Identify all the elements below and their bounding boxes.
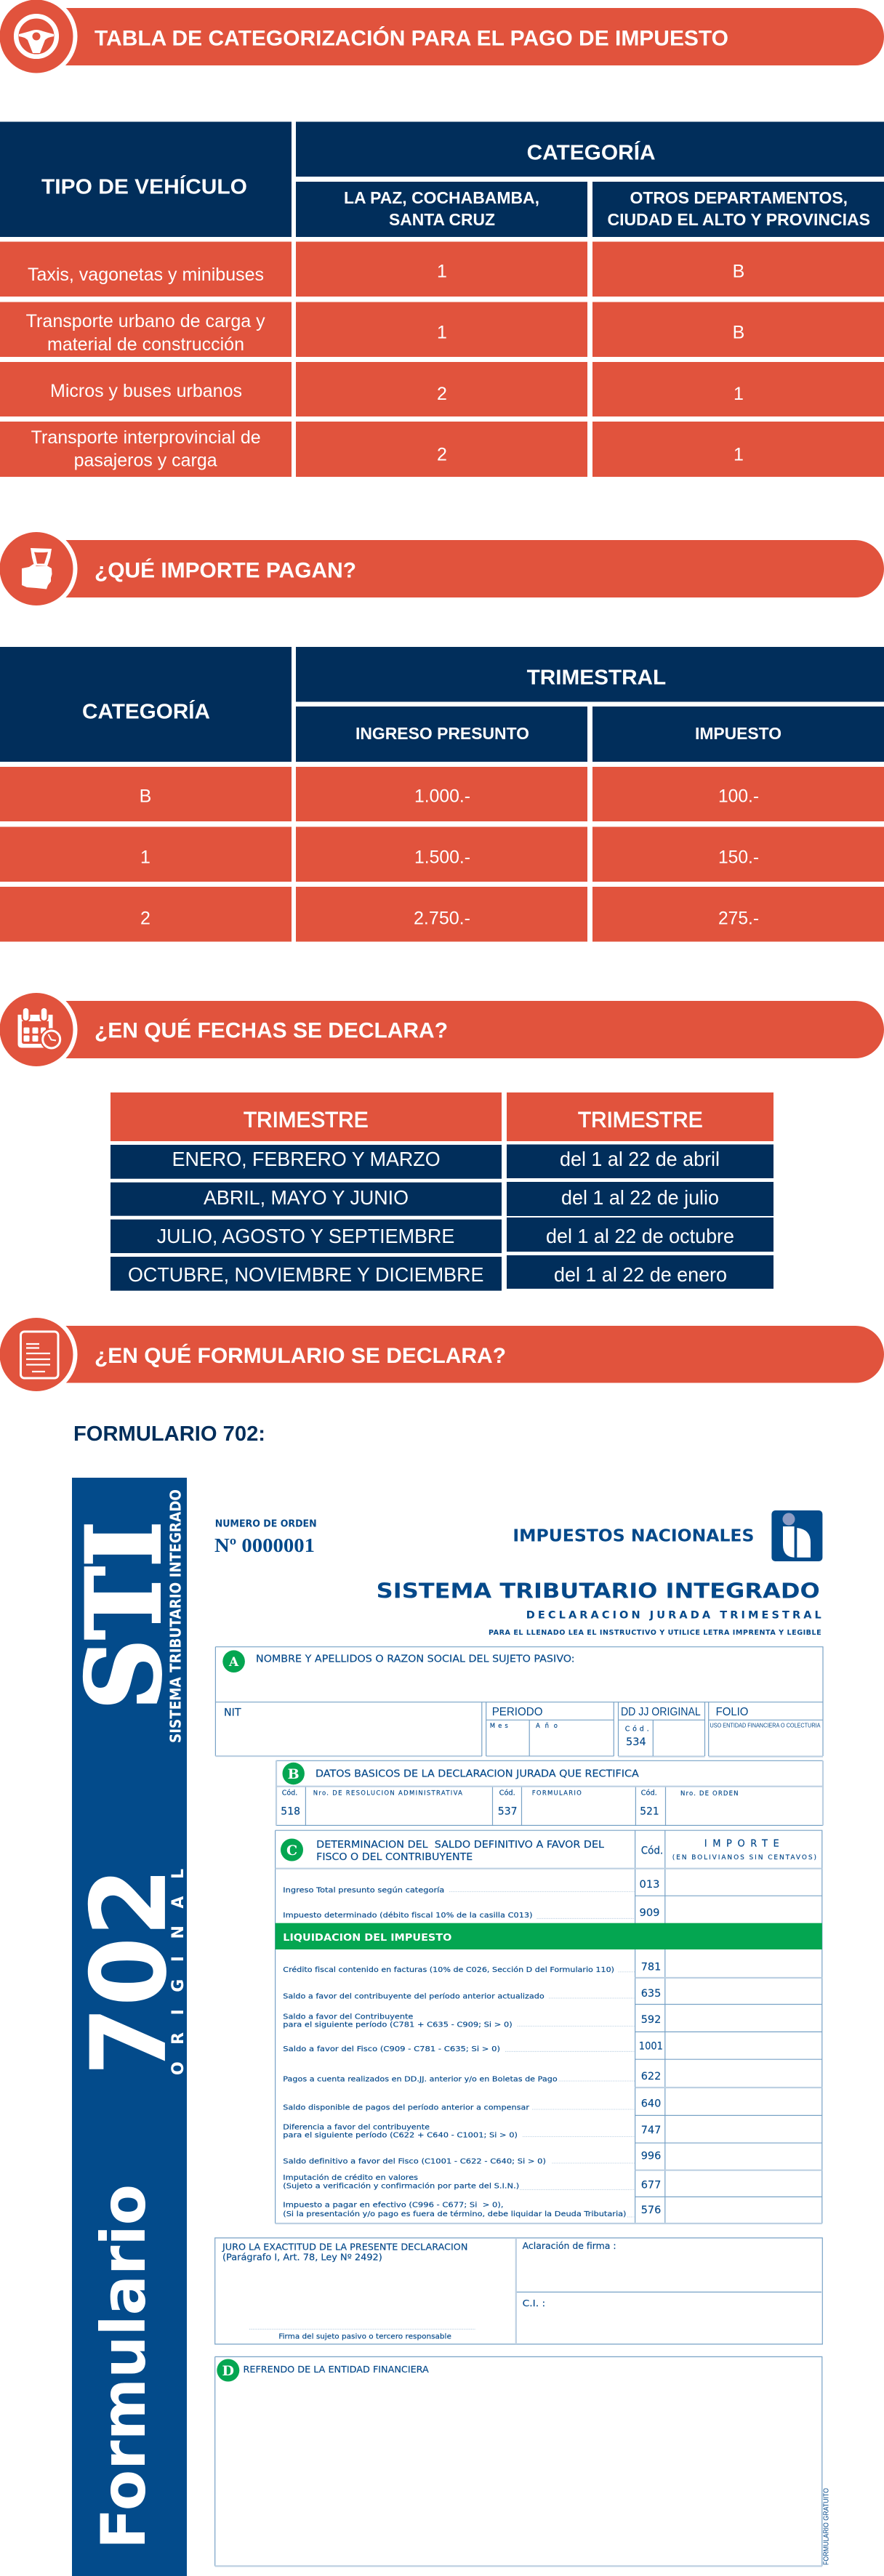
- table rows: 1: [140, 848, 150, 868]
- table headers: CATEGORÍA: [82, 699, 210, 723]
- form header: impuestos nacionales: IMPUESTOS NACIONALES: [513, 1527, 754, 1546]
- badge D: D: [222, 2363, 234, 2379]
- form section A: Mes: [490, 1723, 508, 1730]
- table rows: 100.-: [718, 786, 759, 807]
- table headers: TRIMESTRAL: [527, 666, 666, 689]
- form signature box: C.I. :: [523, 2298, 545, 2309]
- table rows: del 1 al 22 de abril: [560, 1148, 720, 1170]
- banner: formulario: [0, 1313, 884, 1396]
- heading: TABLA DE CATEGORIZACIÓN PARA EL PAGO DE IMPUESTO: [95, 26, 728, 51]
- table headers: LA PAZ, COCHABAMBA,: [344, 188, 539, 207]
- form row labels: Diferencia a favor del contribuyente: [283, 2123, 430, 2131]
- icon: steering wheel: [16, 16, 57, 57]
- heading: ¿EN QUÉ FECHAS SE DECLARA?: [95, 1018, 448, 1042]
- form section B: [276, 1760, 823, 1825]
- form signature box: [215, 2238, 822, 2344]
- table rows: 275.-: [718, 908, 759, 928]
- banner: qué importe pagan: [0, 528, 884, 610]
- form section C: DETERMINACION DEL SALDO DEFINITIVO A FAVOR DEL: [316, 1840, 605, 1851]
- table headers: INGRESO PRESUNTO: [355, 724, 529, 743]
- form section D: [215, 2356, 831, 2566]
- form section A: DD JJ ORIGINAL: [621, 1706, 701, 1718]
- form section D: FORMULARIO GRATUITO: [823, 2488, 831, 2565]
- form row labels: Saldo definitivo a favor del Fisco (C1001 - C622 - C640; Si > 0): [283, 2157, 546, 2165]
- table rows: Transporte interprovincial de: [31, 427, 261, 448]
- table headers: [41, 140, 870, 229]
- table headers: CATEGORÍA: [527, 140, 656, 165]
- table headers: OTROS DEPARTAMENTOS,: [630, 188, 848, 207]
- banner: tabla de categorización: [0, 0, 884, 77]
- table rows: del 1 al 22 de julio: [561, 1186, 719, 1209]
- banner: fechas: [0, 989, 884, 1071]
- form row labels: Saldo a favor del Fisco (C909 - C781 - C635; Si > 0): [283, 2045, 500, 2053]
- form row codes: 576: [641, 2205, 661, 2216]
- form section D: REFRENDO DE LA ENTIDAD FINANCIERA: [243, 2364, 430, 2375]
- table rows: Micros y buses urbanos: [50, 381, 242, 401]
- icon: logo: [771, 1510, 822, 1561]
- table rows: 2: [437, 384, 447, 404]
- form section C: [276, 1830, 822, 2223]
- heading: ¿EN QUÉ FORMULARIO SE DECLARA?: [95, 1343, 506, 1368]
- table rows: B: [733, 262, 744, 282]
- form section A: FOLIO: [716, 1706, 748, 1718]
- badge B: [282, 1763, 305, 1784]
- form row labels: Pagos a cuenta realizados en DD.JJ. anterior y/o en Boletas de Pago: [283, 2076, 558, 2084]
- badge C: [281, 1839, 303, 1861]
- form row codes: [639, 1879, 663, 2216]
- form signature box: Firma del sujeto pasivo o tercero responsable: [278, 2333, 451, 2340]
- badge D: [217, 2359, 239, 2381]
- form row codes: 592: [641, 2014, 661, 2026]
- form section B: 518: [281, 1806, 300, 1818]
- form row codes: 1001: [639, 2041, 663, 2053]
- table rows: 1: [437, 262, 447, 282]
- form section C: IMPORTE: [704, 1839, 779, 1850]
- form section A: 534: [626, 1736, 646, 1748]
- form section A: Cód.: [625, 1725, 649, 1733]
- table headers: [244, 1108, 702, 1132]
- table rows: 1.000.-: [414, 786, 470, 807]
- form section A: [215, 1647, 823, 1756]
- form section C: Cód.: [641, 1846, 663, 1857]
- table rows: del 1 al 22 de octubre: [546, 1225, 734, 1247]
- icon: hand holding bill: [22, 548, 52, 589]
- table rows: [26, 262, 744, 471]
- form section A: USO ENTIDAD FINANCIERA O COLECTURIA: [710, 1722, 821, 1729]
- badge C: C: [286, 1843, 297, 1859]
- table rows: 2: [140, 908, 150, 928]
- table headers: [82, 666, 781, 743]
- form row codes: 747: [641, 2125, 661, 2136]
- form section A: NOMBRE Y APELLIDOS O RAZON SOCIAL DEL SUJETO PASIVO:: [256, 1654, 575, 1665]
- form section B: Nro. DE ORDEN: [680, 1790, 739, 1798]
- table headers: TRIMESTRE: [578, 1108, 702, 1132]
- form row labels: Impuesto a pagar en efectivo (C996 - C677; Si > 0),: [283, 2202, 503, 2210]
- form row labels: Impuesto determinado (débito fiscal 10% de la casilla C013): [283, 1911, 533, 1920]
- form title: PARA EL LLENADO LEA EL INSTRUCTIVO Y UTILICE LETRA IMPRENTA Y LEGIBLE: [489, 1629, 821, 1637]
- form section B: Cód.: [641, 1789, 657, 1797]
- table rows: 150.-: [718, 848, 759, 868]
- table rows: del 1 al 22 de enero: [554, 1263, 727, 1286]
- form signature box: Aclaración de firma :: [523, 2241, 616, 2251]
- table rows: 1: [734, 384, 744, 404]
- table rows: [140, 786, 759, 928]
- panel: blue sidebar: ORIGINAL: [169, 1869, 188, 2075]
- form header: número de orden: [214, 1519, 317, 1556]
- panel: blue sidebar: SISTEMA TRIBUTARIO INTEGRADO: [166, 1489, 184, 1743]
- form signature box: JURO LA EXACTITUD DE LA PRESENTE DECLARACION: [222, 2242, 467, 2252]
- liquidación band: LIQUIDACION DEL IMPUESTO: [283, 1932, 451, 1944]
- table rows: 2: [437, 445, 447, 465]
- table: trimestral: [0, 647, 884, 942]
- table rows: Taxis, vagonetas y minibuses: [28, 265, 264, 285]
- form row labels: para el siguiente período (C622 + C640 - C1001; Si > 0): [283, 2131, 518, 2140]
- table rows: 2.750.-: [414, 908, 470, 928]
- form row codes: 677: [641, 2180, 661, 2191]
- panel: blue sidebar: STI: [64, 1521, 183, 1710]
- panel: blue sidebar: 702: [68, 1867, 190, 2076]
- table rows: JULIO, AGOSTO Y SEPTIEMBRE: [157, 1225, 454, 1247]
- form row labels: Imputación de crédito en valores: [283, 2173, 418, 2182]
- form title: SISTEMA TRIBUTARIO INTEGRADO: [377, 1579, 820, 1603]
- table rows: 1: [734, 445, 744, 465]
- table: fechas de declaración: [110, 1092, 774, 1291]
- form row labels: Saldo disponible de pagos del período anterior a compensar: [283, 2104, 530, 2112]
- form signature box: (Parágrafo I, Art. 78, Ley Nº 2492): [222, 2252, 382, 2262]
- form row labels: Saldo a favor del Contribuyente: [283, 2013, 413, 2021]
- table rows: B: [140, 786, 151, 807]
- icon: document: [20, 1332, 58, 1378]
- form section C: FISCO O DEL CONTRIBUYENTE: [316, 1852, 473, 1863]
- table rows: Transporte urbano de carga y: [26, 311, 265, 331]
- badge A: [222, 1650, 245, 1673]
- form section A: NIT: [224, 1707, 241, 1719]
- table rows: material de construcción: [47, 334, 244, 355]
- form row labels: para el siguiente período (C781 + C635 - C909; Si > 0): [283, 2021, 513, 2029]
- form row labels: Ingreso Total presunto según categoría: [283, 1886, 444, 1895]
- form section B: DATOS BASICOS DE LA DECLARACION JURADA QUE RECTIFICA: [316, 1768, 639, 1779]
- table headers: SANTA CRUZ: [389, 210, 495, 229]
- table headers: TRIMESTRE: [244, 1108, 368, 1132]
- form section B: FORMULARIO: [532, 1790, 582, 1797]
- form section A: Año: [536, 1723, 558, 1730]
- heading: ¿QUÉ IMPORTE PAGAN?: [95, 558, 356, 583]
- form row labels: (Sujeto a verificación y confirmación por parte del S.I.N.): [283, 2181, 519, 2190]
- badge A: A: [228, 1655, 239, 1670]
- form row codes: 996: [641, 2150, 661, 2162]
- form header: impuestos nacionales: [513, 1510, 822, 1561]
- form section B: Cód.: [499, 1789, 515, 1797]
- form row labels: Crédito fiscal contenido en facturas (10% de C026, Sección D del Formulario 110): [283, 1965, 614, 1974]
- icon: calendar with clock: [17, 1007, 63, 1051]
- form row labels: Saldo a favor del contribuyente del período anterior actualizado: [283, 1992, 545, 2001]
- form section A: PERIODO: [492, 1706, 542, 1718]
- form section B: Nro. DE RESOLUCION ADMINISTRATIVA: [313, 1790, 462, 1797]
- form row codes: 909: [640, 1907, 660, 1919]
- liquidación band: [276, 1923, 822, 1949]
- table rows: ABRIL, MAYO Y JUNIO: [204, 1186, 409, 1209]
- form row codes: 781: [641, 1961, 661, 1973]
- table rows: [128, 1148, 734, 1286]
- table rows: ENERO, FEBRERO Y MARZO: [172, 1148, 441, 1170]
- badge B: B: [288, 1766, 300, 1782]
- table headers: IMPUESTO: [695, 724, 781, 743]
- form row labels: (Si la presentación y/o pago es fuera de término, debe liquidar la Deuda Tributaria): [283, 2210, 627, 2218]
- table: tipo de vehículo y categoría: [0, 122, 884, 477]
- form row codes: 013: [640, 1879, 660, 1891]
- form section B: 521: [640, 1806, 659, 1818]
- panel: blue sidebar: Formulario: [88, 2184, 159, 2549]
- form row codes: 640: [641, 2098, 661, 2110]
- form section B: 537: [498, 1806, 518, 1818]
- heading: formulario 702: FORMULARIO 702:: [73, 1422, 265, 1446]
- form section B: Cód.: [282, 1789, 297, 1797]
- form section C: (EN BOLIVIANOS SIN CENTAVOS): [672, 1854, 816, 1861]
- table rows: OCTUBRE, NOVIEMBRE Y DICIEMBRE: [128, 1263, 484, 1286]
- table headers: TIPO DE VEHÍCULO: [41, 174, 247, 199]
- form header: número de orden: Nº 0000001: [214, 1534, 315, 1556]
- form title: DECLARACION JURADA TRIMESTRAL: [526, 1610, 821, 1622]
- table rows: B: [733, 323, 744, 343]
- form row labels: [283, 1886, 627, 2218]
- table rows: pasajeros y carga: [74, 451, 217, 471]
- form header: número de orden: NUMERO DE ORDEN: [215, 1519, 317, 1530]
- table rows: 1.500.-: [414, 848, 470, 868]
- form title: [377, 1579, 821, 1637]
- panel: blue sidebar: [64, 1478, 190, 2576]
- form row codes: 622: [641, 2071, 661, 2082]
- form row codes: 635: [641, 1988, 661, 2000]
- table headers: CIUDAD EL ALTO Y PROVINCIAS: [608, 210, 870, 229]
- table rows: 1: [437, 323, 447, 343]
